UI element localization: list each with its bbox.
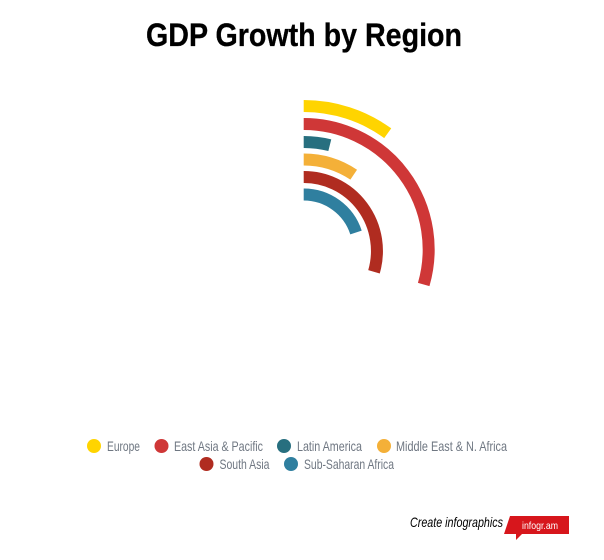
- legend item: Sub-Saharan Africa: [284, 456, 394, 472]
- legend item: Europe: [87, 438, 140, 454]
- arc: Middle East & N. Africa: [304, 160, 354, 175]
- legend: [87, 438, 507, 472]
- legend item: East Asia & Pacific: [154, 438, 263, 454]
- legend item: Sub-Saharan Africa: Sub-Saharan Africa: [304, 456, 394, 472]
- footer: infogr.am badge: infogr.am: [522, 520, 558, 532]
- arc: Europe: [304, 106, 388, 133]
- legend item: Middle East & N. Africa: [377, 438, 507, 454]
- legend item: Europe: Europe: [107, 438, 140, 454]
- legend item: East Asia & Pacific: East Asia & Pacific: [174, 438, 263, 454]
- title: GDP Growth by Region: [146, 17, 462, 53]
- arc: South Asia: [304, 177, 377, 272]
- legend item: South Asia: [200, 456, 270, 472]
- legend item: Latin America: Latin America: [297, 438, 362, 454]
- arc: Sub-Saharan Africa: [304, 194, 356, 232]
- legend item: Latin America: [277, 438, 362, 454]
- arc: Latin America: [304, 142, 330, 145]
- legend item: Middle East & N. Africa: Middle East & N. Africa: [396, 438, 507, 454]
- legend item: South Asia: South Asia: [220, 456, 270, 472]
- footer: infogr.am badge: [504, 516, 569, 540]
- arc: East Asia & Pacific: [304, 124, 429, 284]
- radial arc chart: [304, 106, 429, 284]
- footer: create infographics credit: Create infographics: [410, 514, 503, 530]
